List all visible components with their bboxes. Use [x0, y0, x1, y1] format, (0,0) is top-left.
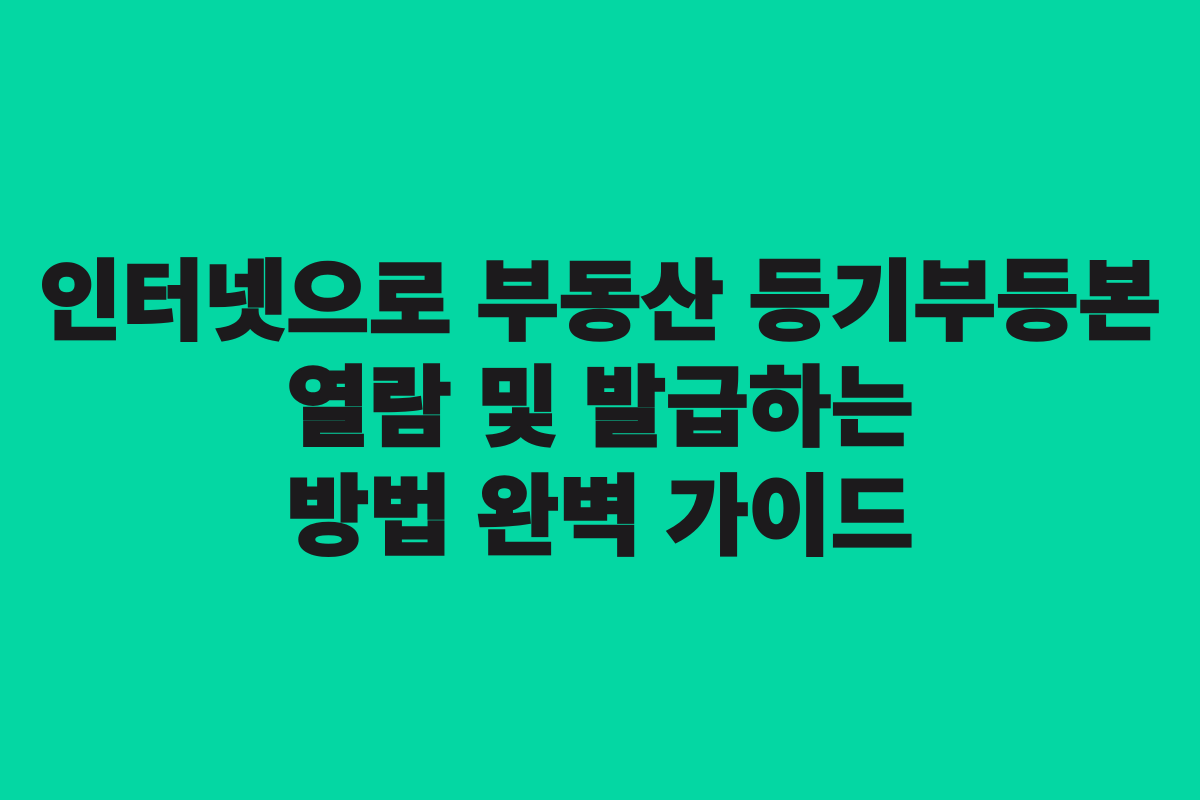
title: 방법 완벽 가이드	[287, 469, 913, 566]
title: 인터넷으로 부동산 등기부등본	[39, 254, 1161, 351]
title: 열람 및 발급하는	[287, 360, 913, 457]
title	[39, 254, 1161, 566]
